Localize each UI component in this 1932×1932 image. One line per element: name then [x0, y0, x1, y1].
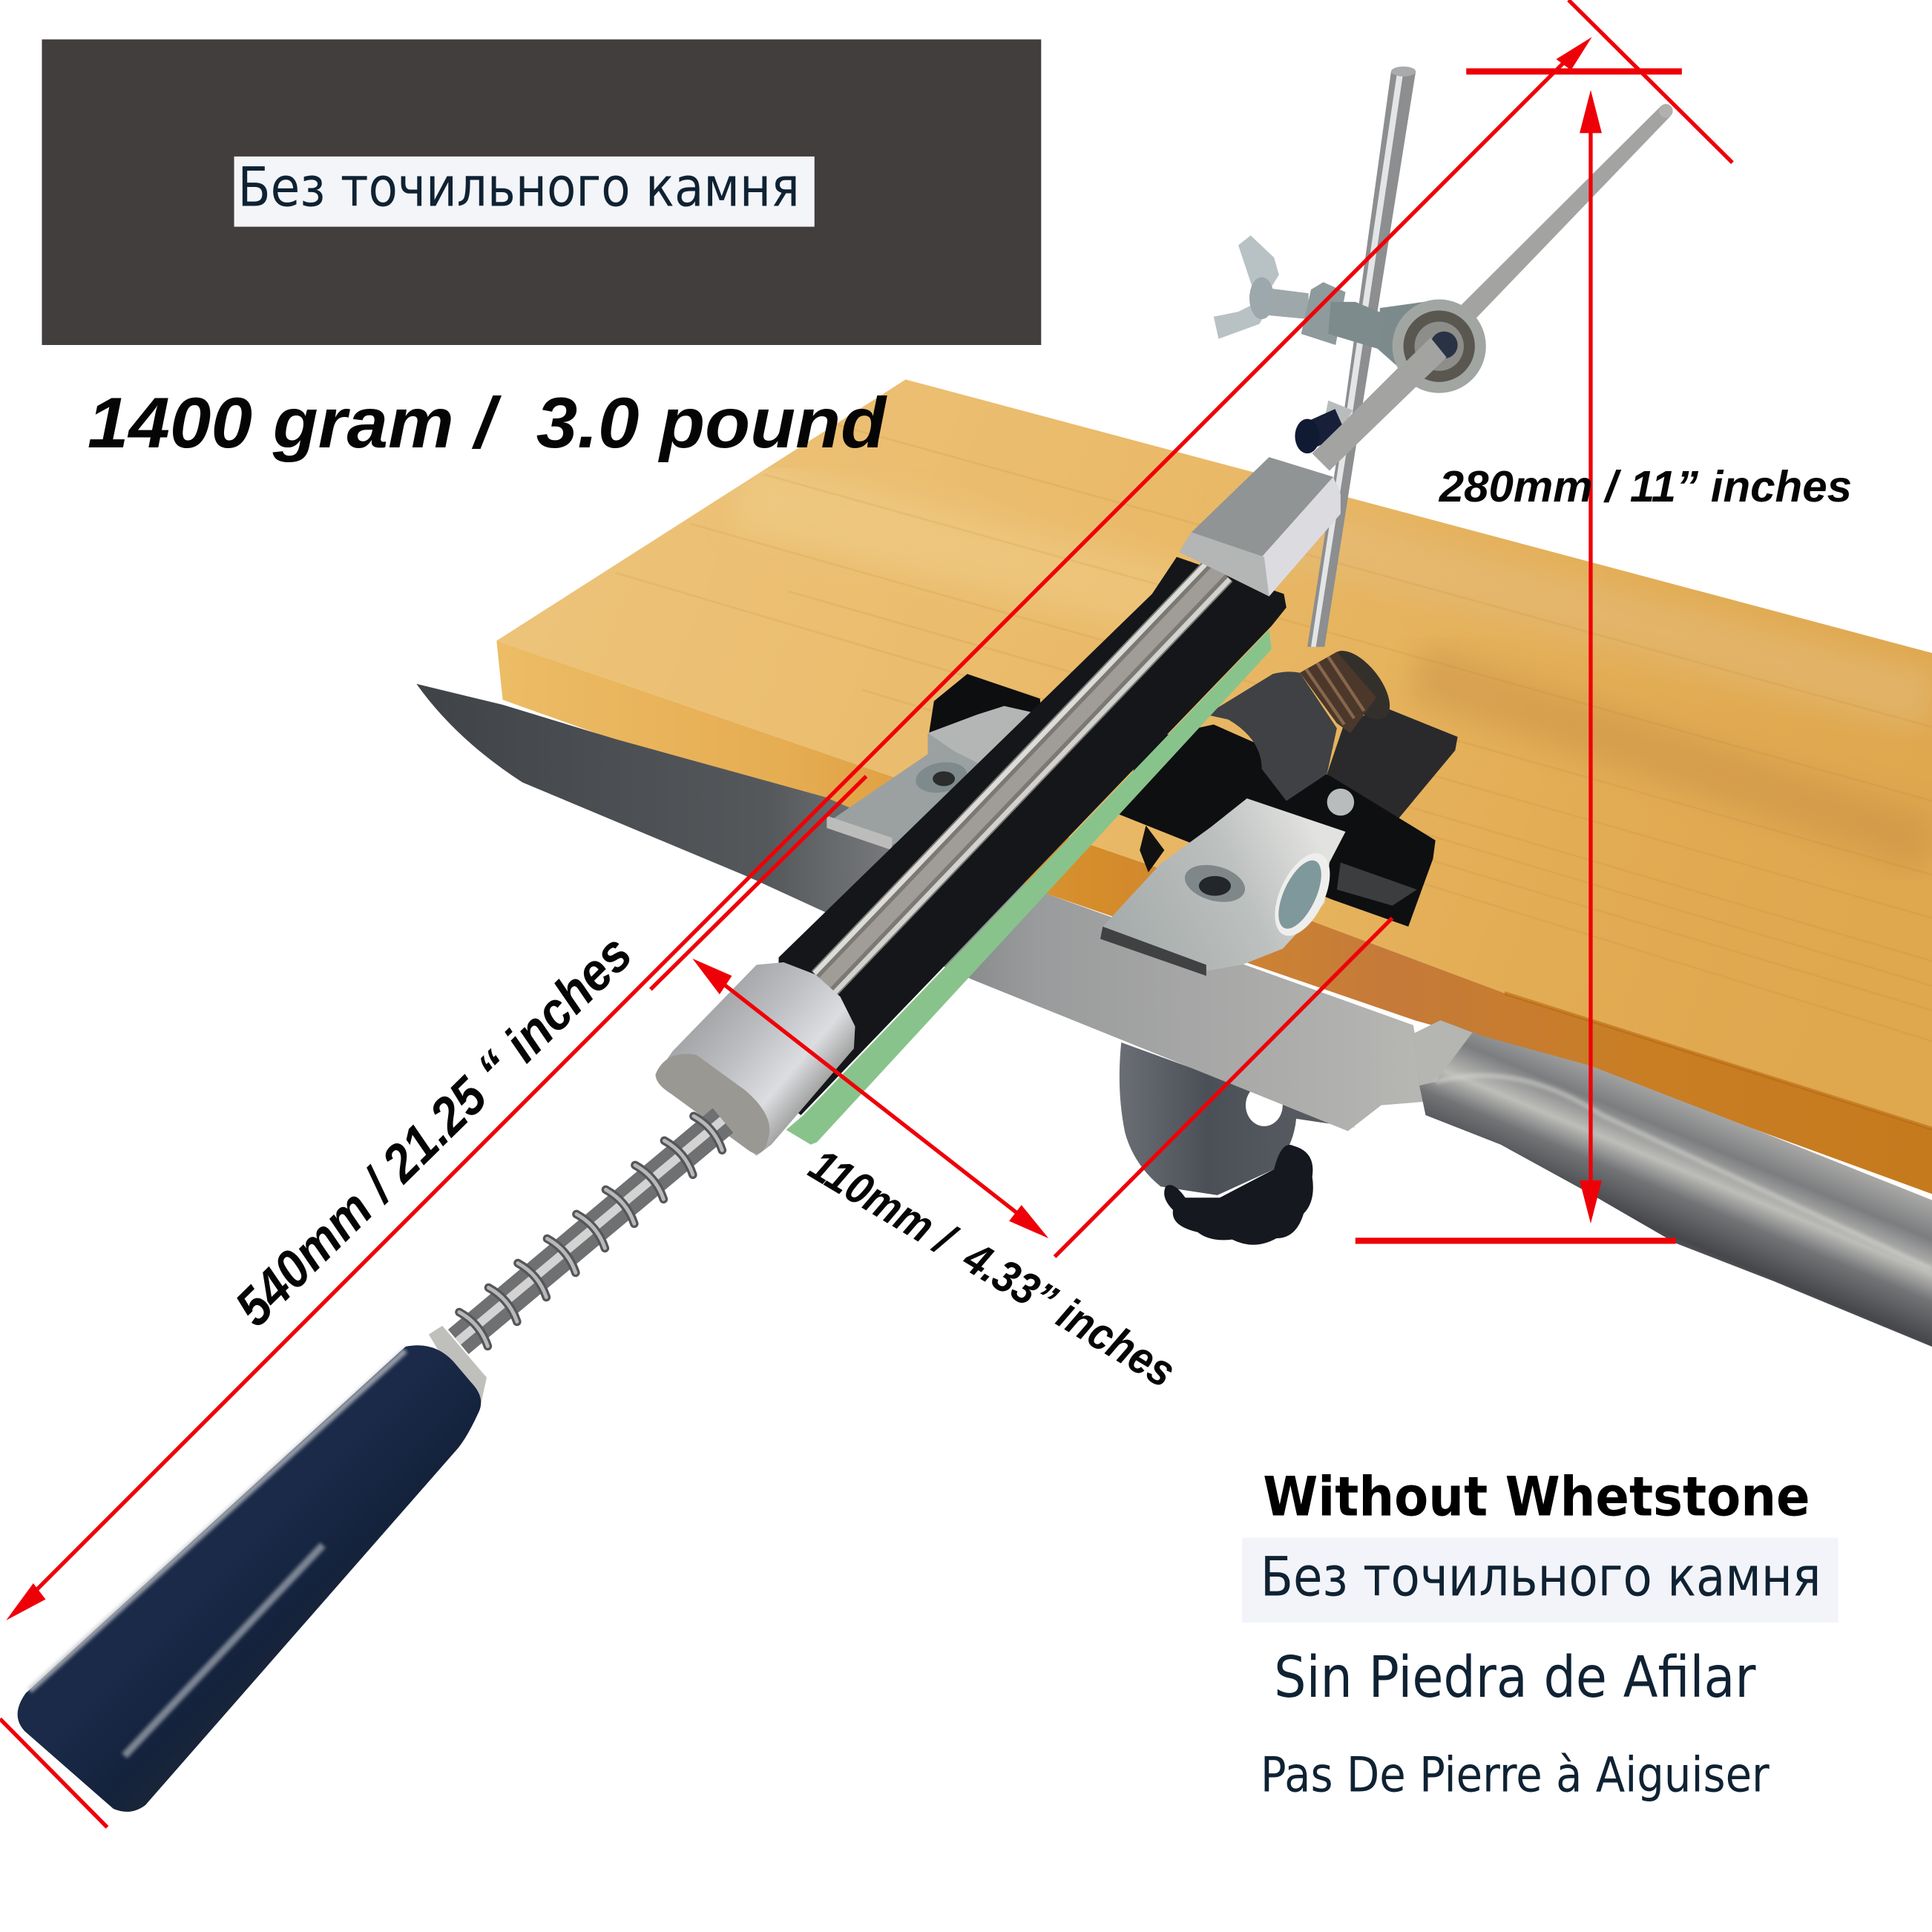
without whetstone multilingual block: [1242, 1466, 1839, 1804]
wooden board: [496, 380, 1932, 1194]
silver guide rod: [815, 559, 1229, 993]
dimension: base width 110mm: [692, 918, 1393, 1257]
french text: Pas De Pierre à Aiguiser: [1261, 1748, 1770, 1804]
black stone holder: [776, 557, 1287, 1115]
right silver clamp: [1100, 798, 1346, 976]
spring and shaft: [444, 1103, 737, 1358]
weight heading: 1400 gram / 3.0 pound: [88, 384, 887, 463]
blue locking knob: [1295, 401, 1353, 453]
aluminium block: [1179, 457, 1341, 597]
width label: 110mm / 4.33” inches: [801, 1139, 1184, 1398]
russian text: Без точильного камня: [1261, 1546, 1821, 1609]
pivot tube and spring: [1206, 641, 1401, 801]
black rail front section: [1117, 724, 1436, 927]
length label: 540mm / 21.25 “ inches: [224, 924, 643, 1338]
black rail rear section: [929, 674, 1048, 764]
base plate: [1322, 706, 1458, 823]
dark banner with russian label: Без точильного камня: [238, 156, 800, 219]
knife handle: [1413, 1020, 1932, 1347]
vertical post: [1307, 67, 1416, 647]
wing nut and bearing eye: [1214, 235, 1486, 393]
knurled screw: [1327, 789, 1354, 815]
end cap cylinder: [656, 962, 855, 1156]
clamp body under the blade: [1120, 1042, 1356, 1195]
russian label box: [1242, 1538, 1839, 1623]
handle grip: [18, 1326, 487, 1812]
english heading: Without Whetstone: [1263, 1466, 1810, 1529]
dimension: height 280mm: [1356, 71, 1682, 1241]
green whetstone edge: [786, 630, 1272, 1145]
rod through bearing: [1312, 338, 1447, 470]
dark banner with russian label: [42, 39, 1041, 345]
spanish text: Sin Piedra de Afilar: [1274, 1645, 1756, 1711]
clamp locking knob: [1164, 1145, 1313, 1245]
height label: 280mm / 11” inches: [1439, 461, 1852, 511]
left silver clamp: [827, 706, 1031, 850]
knife blade: [416, 684, 1427, 1131]
long thin rod: [1312, 104, 1673, 470]
